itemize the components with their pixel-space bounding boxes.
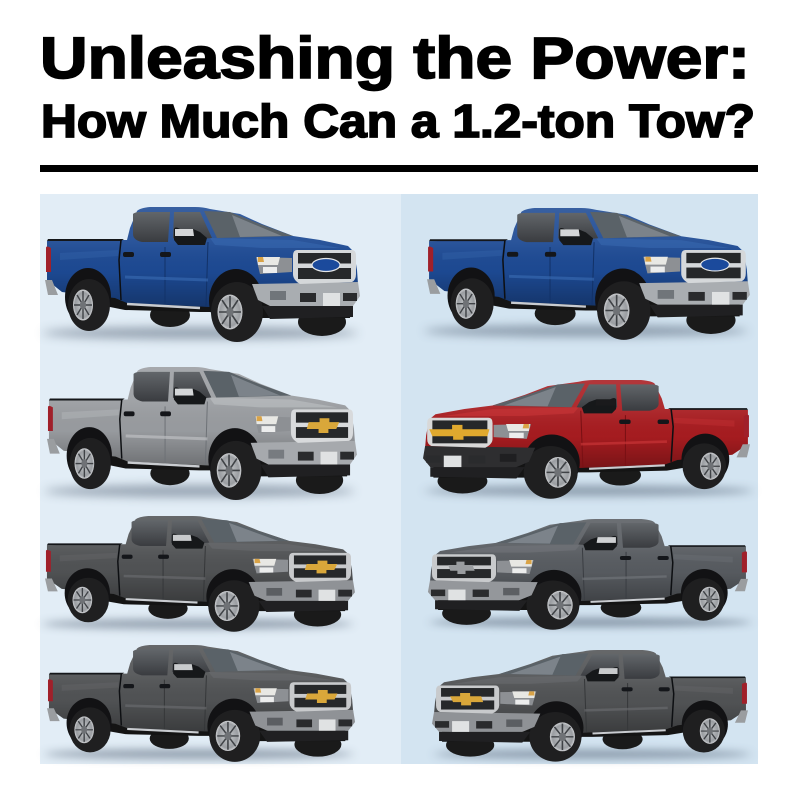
title divider rule [40,165,758,172]
title [40,26,755,147]
truck: blue Ford, right column [424,208,750,340]
truck: dark gray Chevrolet, left column [44,645,355,762]
truck: dark gray Chevrolet, facing left, right column [432,650,751,762]
truck: blue Ford, front right, left column [42,207,360,342]
truck: red Chevrolet, facing left, right column [423,380,753,499]
title: How Much Can a 1.2-ton Tow? [41,95,755,147]
truck: gray Chevrolet, left column [42,516,355,632]
panel: left truck column [40,194,401,764]
truck: gray, facing left, right column [428,519,751,630]
panel: right truck column [401,194,758,764]
title: Unleashing the Power: [40,26,750,91]
truck: silver Chevrolet, left column [44,367,357,500]
